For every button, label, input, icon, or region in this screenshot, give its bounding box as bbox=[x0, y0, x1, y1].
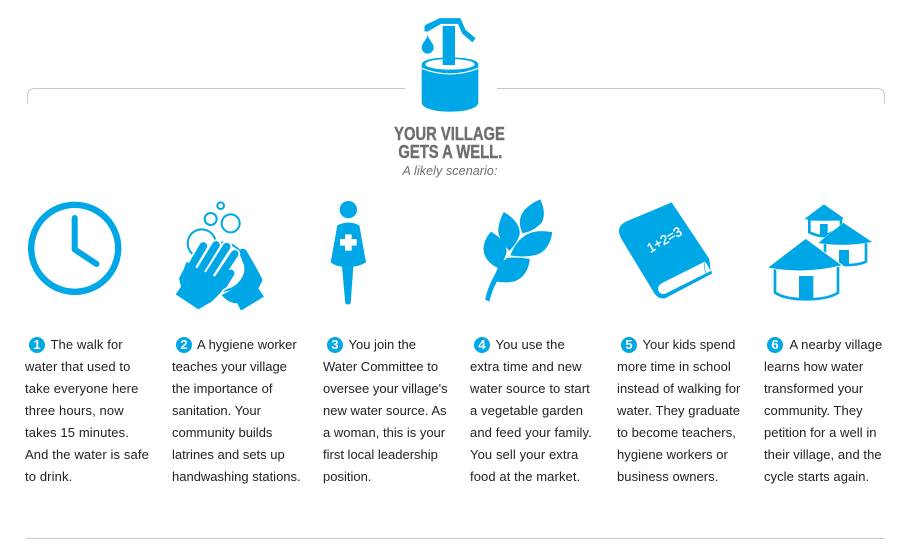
text 3: Water Committee to bbox=[323, 359, 438, 374]
text 1: And the water is safe bbox=[25, 447, 149, 462]
step 3 bbox=[323, 337, 448, 484]
badge 2 bbox=[176, 337, 192, 353]
title: GETS A WELL. bbox=[398, 142, 502, 162]
badge 5 bbox=[621, 337, 637, 353]
text 5: hygiene workers or bbox=[617, 447, 728, 462]
text 3: new water source. As bbox=[323, 403, 447, 418]
text 4: You sell your extra bbox=[470, 447, 578, 462]
badge 4: 4 bbox=[478, 337, 486, 352]
text 2: sanitation. Your bbox=[172, 403, 261, 418]
text 1: take everyone here bbox=[25, 381, 138, 396]
text 5: Your kids spend bbox=[642, 337, 735, 352]
text 3: You join the bbox=[348, 337, 416, 352]
text 2: community builds bbox=[172, 425, 272, 440]
text 5 bbox=[617, 337, 740, 484]
text 6: A nearby village bbox=[790, 337, 882, 352]
text 6: cycle starts again. bbox=[764, 469, 869, 484]
badge 4 bbox=[474, 337, 490, 353]
text 5: business owners. bbox=[617, 469, 718, 484]
badge 3: 3 bbox=[331, 337, 339, 352]
text 6: learns how water bbox=[764, 359, 863, 374]
text 1: The walk for bbox=[50, 337, 123, 352]
text 5: water. They graduate bbox=[617, 403, 740, 418]
text 2: teaches your village bbox=[172, 359, 287, 374]
subtitle: A likely scenario: bbox=[402, 164, 498, 178]
text 1: water that used to bbox=[25, 359, 130, 374]
text 6: their village, and the bbox=[764, 447, 882, 462]
text 3: oversee your village's bbox=[323, 381, 448, 396]
badge 6: 6 bbox=[771, 337, 779, 352]
text 1: takes 15 minutes. bbox=[25, 425, 129, 440]
text 3: position. bbox=[323, 469, 371, 484]
text 4: a vegetable garden bbox=[470, 403, 583, 418]
text 3: first local leadership bbox=[323, 447, 438, 462]
book label: 1+2=3 bbox=[644, 224, 685, 256]
step 1 bbox=[25, 337, 149, 484]
step 2 bbox=[172, 337, 301, 484]
text 6: transformed your bbox=[764, 381, 863, 396]
text 2: the importance of bbox=[172, 381, 272, 396]
text 5: instead of walking for bbox=[617, 381, 740, 396]
text 6: community. They bbox=[764, 403, 863, 418]
badge 2: 2 bbox=[180, 337, 188, 352]
badge 1: 1 bbox=[33, 337, 41, 352]
text 4: food at the market. bbox=[470, 469, 580, 484]
text 4 bbox=[470, 337, 592, 484]
badge 1 bbox=[29, 337, 45, 353]
text 5: more time in school bbox=[617, 359, 731, 374]
text 3 bbox=[323, 337, 448, 484]
text 4: extra time and new bbox=[470, 359, 582, 374]
text 2: latrines and sets up bbox=[172, 447, 285, 462]
text 5: to become teachers, bbox=[617, 425, 736, 440]
text 1: to drink. bbox=[25, 469, 72, 484]
text 6: petition for a well in bbox=[764, 425, 877, 440]
step 6 bbox=[764, 337, 882, 484]
badge 5: 5 bbox=[625, 337, 633, 352]
title: YOUR VILLAGE bbox=[395, 124, 505, 144]
text 1 bbox=[25, 337, 149, 484]
badge 3 bbox=[327, 337, 343, 353]
text 6 bbox=[764, 337, 882, 484]
badge 6 bbox=[767, 337, 783, 353]
text 4: and feed your family. bbox=[470, 425, 592, 440]
text 2: A hygiene worker bbox=[197, 337, 297, 352]
text 4: water source to start bbox=[470, 381, 590, 396]
text 3: a woman, this is your bbox=[323, 425, 445, 440]
text 2: handwashing stations. bbox=[172, 469, 301, 484]
step 4 bbox=[470, 337, 592, 484]
title bbox=[394, 124, 505, 162]
step 5 bbox=[617, 337, 740, 484]
text 2 bbox=[172, 337, 301, 484]
text 1: three hours, now bbox=[25, 403, 124, 418]
text 4: You use the bbox=[496, 337, 565, 352]
